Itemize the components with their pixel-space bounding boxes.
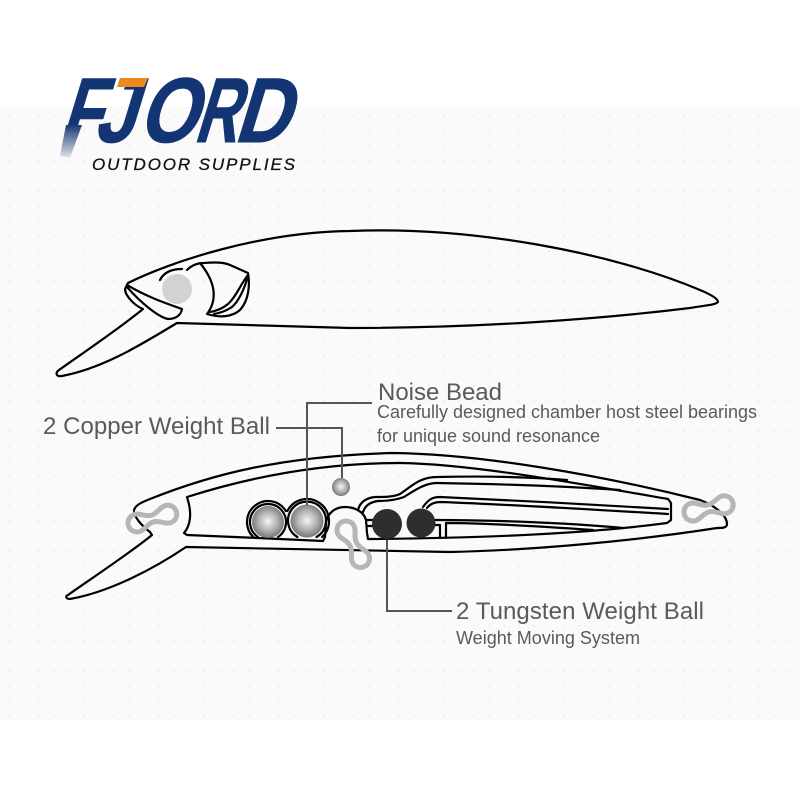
copper weight ball 1: [252, 506, 284, 538]
label: 2 tungsten weight ball: Weight Moving System: [456, 628, 640, 648]
logo wordmark: [52, 58, 313, 162]
icon: exterior eye: [162, 274, 192, 304]
label: noise bead: [377, 379, 757, 446]
label: 2 copper weight ball: 2 Copper Weight Ball: [43, 413, 270, 440]
logo orange bar: [117, 78, 148, 87]
hook ring: belly: [334, 518, 373, 571]
tungsten weight ball 2: [406, 508, 436, 538]
leader line: tungsten weight: [387, 540, 452, 611]
label: noise bead: for unique sound resonance: [377, 426, 600, 446]
leader line: noise bead: [276, 428, 342, 478]
logo wordmark: R: [187, 58, 262, 162]
section chamber floor: [367, 520, 623, 538]
section chamber upper rails: [358, 477, 620, 512]
section chamber lower rails: [423, 497, 668, 514]
logo wordmark: J: [87, 59, 159, 162]
label: noise bead: Noise Bead: [378, 379, 502, 406]
exterior mouth: [127, 285, 182, 319]
label: noise bead: Carefully designed chamber host steel bearings: [377, 402, 757, 422]
leader line: copper weight: [307, 403, 372, 505]
exterior eye arc: [160, 269, 182, 280]
hook ring: tail: [682, 494, 735, 523]
exterior body: [57, 230, 718, 376]
lure cross-section: [66, 453, 727, 599]
section inner cavity: [184, 463, 671, 541]
logo wordmark: O: [131, 60, 221, 162]
logo wordmark: D: [227, 59, 313, 162]
label: 2 tungsten weight ball: [456, 598, 704, 648]
section outer body: [66, 453, 727, 599]
lure exterior outline: [57, 230, 718, 376]
section ball cages: [247, 499, 329, 537]
logo wordmark: F: [52, 58, 125, 162]
label: 2 tungsten weight ball: 2 Tungsten Weight Ball: [456, 598, 704, 625]
logo tagline: OUTDOOR SUPPLIES: [92, 155, 296, 174]
exterior gill inner strokes: [210, 275, 248, 314]
hook ring: front: [126, 503, 179, 534]
exterior gill: [187, 262, 249, 316]
tungsten weight ball 1: [372, 509, 402, 539]
logo: Fjord Outdoor Supplies: [52, 58, 313, 174]
noise bead: [332, 478, 350, 496]
logo F tail fade: [60, 125, 82, 158]
copper weight ball 2: [290, 504, 324, 538]
